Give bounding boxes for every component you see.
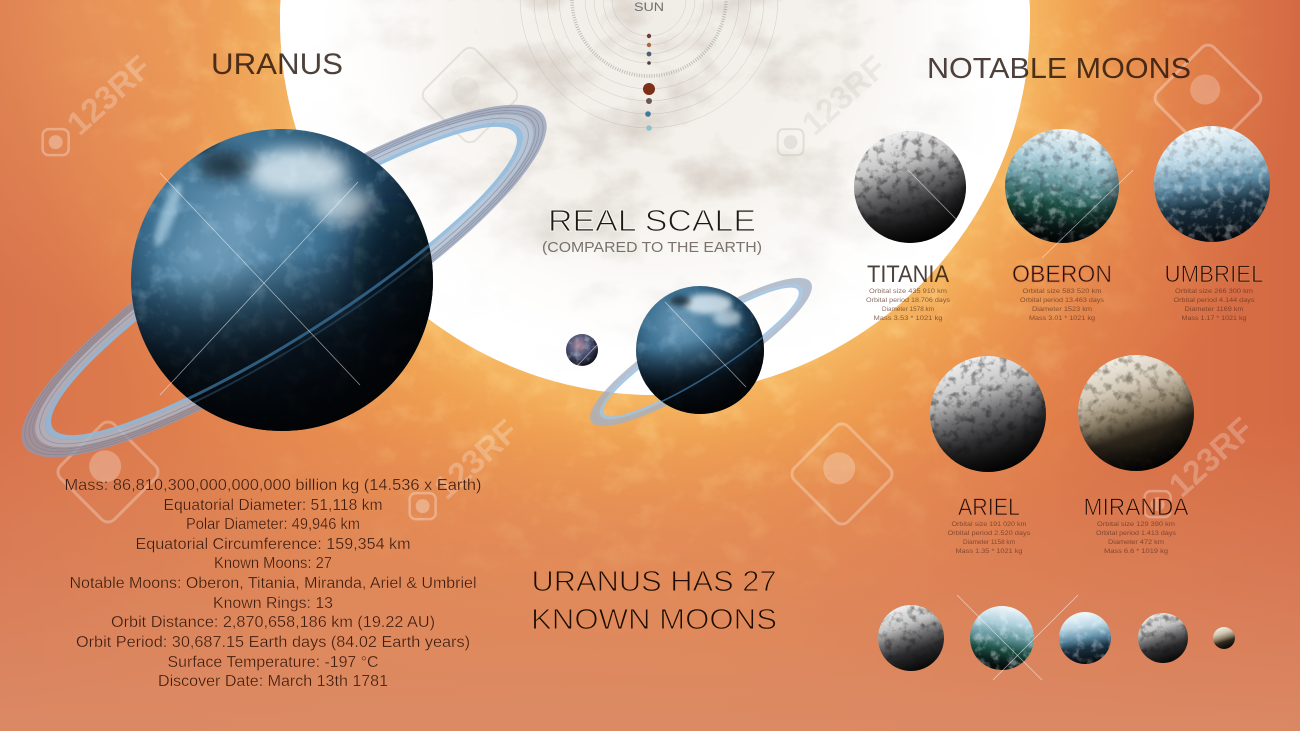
moon: titania bbox=[854, 131, 966, 243]
text block: ariel bbox=[948, 494, 1031, 555]
text block: titania: Diameter 1578 km bbox=[882, 306, 934, 313]
heading: real scale: REAL SCALE bbox=[548, 203, 756, 238]
text block: miranda: Mass 6.6 * 1019 kg bbox=[1104, 548, 1168, 555]
text block: titania: Mass 3.53 * 1021 kg bbox=[874, 315, 943, 322]
rings bbox=[0, 55, 582, 507]
facts list: Surface Temperature: -197 °C bbox=[168, 654, 378, 671]
text block: umbriel: Orbital period 4.144 days bbox=[1174, 297, 1255, 304]
headline: uranus has 27 known moons: KNOWN MOONS bbox=[531, 604, 777, 636]
facts list: Polar Diameter: 49,946 km bbox=[186, 516, 360, 533]
facts list: Known Moons: 27 bbox=[214, 555, 332, 572]
watermarks bbox=[30, 41, 1265, 533]
sun bbox=[280, 0, 1030, 395]
facts list: Mass: 86,810,300,000,000,000 billion kg (14.536 x Earth) bbox=[64, 477, 482, 494]
headline: uranus has 27 known moons: URANUS HAS 27 bbox=[532, 566, 776, 598]
watermarks: 123RF bbox=[795, 48, 893, 142]
front of ring crossing planet bbox=[187, 244, 430, 403]
text block: umbriel bbox=[1164, 261, 1264, 322]
text block: titania bbox=[866, 261, 951, 322]
heading: real scale: (COMPARED TO THE EARTH) bbox=[542, 240, 762, 256]
facts list: Orbit Distance: 2,870,658,186 km (19.22 AU) bbox=[111, 614, 435, 631]
moon: oberon bbox=[1005, 129, 1133, 258]
text block: oberon: Orbital period 13.463 days bbox=[1020, 297, 1105, 304]
text block: oberon: Diameter 1523 km bbox=[1032, 306, 1093, 313]
facts list: Notable Moons: Oberon, Titania, Miranda, Ariel & Umbriel bbox=[70, 575, 476, 592]
text block: titania: Orbital size 435 910 km bbox=[869, 288, 948, 295]
watermarks: 123RF bbox=[1162, 410, 1260, 504]
text block: umbriel: Orbital size 266 300 km bbox=[1175, 288, 1254, 295]
text block: ariel: ARIEL bbox=[958, 494, 1020, 521]
text block: oberon: Mass 3.01 * 1021 kg bbox=[1029, 315, 1095, 322]
text block: ariel: Orbital size 191 020 km bbox=[952, 521, 1027, 528]
text block: umbriel: Diameter 1169 km bbox=[1184, 306, 1244, 313]
moon: miranda bbox=[1078, 355, 1194, 471]
moon: ariel bbox=[930, 356, 1046, 472]
heading: notable moons: NOTABLE MOONS bbox=[927, 53, 1191, 85]
heading: real scale bbox=[542, 203, 762, 256]
facts list: Equatorial Diameter: 51,118 km bbox=[164, 497, 382, 514]
text block: titania: Orbital period 18.706 days bbox=[866, 297, 951, 304]
watermarks: 123RF bbox=[427, 412, 525, 506]
text block: oberon bbox=[1012, 261, 1112, 322]
planet body bbox=[131, 129, 433, 431]
text block: oberon: Orbital size 583 520 km bbox=[1022, 288, 1102, 295]
text block: miranda: Orbital size 129 390 km bbox=[1097, 521, 1176, 528]
text block: oberon: OBERON bbox=[1012, 261, 1112, 288]
watermarks: 123RF bbox=[60, 48, 158, 142]
small uranus with rings bbox=[590, 278, 812, 426]
text block: ariel: Orbital period 2.520 days bbox=[948, 530, 1031, 537]
facts list: Equatorial Circumference: 159,354 km bbox=[136, 536, 410, 553]
title: uranus: URANUS bbox=[211, 48, 343, 81]
facts list bbox=[64, 477, 482, 690]
text block: titania: TITANIA bbox=[867, 261, 949, 288]
facts list: Known Rings: 13 bbox=[213, 595, 333, 612]
facts list: Orbit Period: 30,687.15 Earth days (84.02 Earth years) bbox=[76, 634, 470, 651]
text block: umbriel: UMBRIEL bbox=[1164, 261, 1264, 288]
facts list: Discover Date: March 13th 1781 bbox=[158, 673, 388, 690]
large planet with rings bbox=[21, 104, 547, 458]
moon size comparison row bbox=[878, 595, 1235, 680]
text block: miranda: Orbital period 1.413 days bbox=[1096, 530, 1177, 537]
text block: miranda bbox=[1084, 494, 1188, 555]
text block: ariel: Diameter 1158 km bbox=[963, 539, 1015, 546]
text block: umbriel: Mass 1.17 * 1021 kg bbox=[1182, 315, 1247, 322]
text block: ariel: Mass 1.35 * 1021 kg bbox=[956, 548, 1023, 555]
headline: uranus has 27 known moons bbox=[531, 566, 777, 636]
text block: miranda: Diameter 472 km bbox=[1108, 539, 1165, 546]
icon: earth bbox=[566, 334, 598, 366]
moon: umbriel bbox=[1154, 126, 1270, 242]
text block: miranda: MIRANDA bbox=[1084, 494, 1188, 521]
label: sun: SUN bbox=[634, 0, 664, 14]
solar system diagram bbox=[520, 0, 778, 131]
